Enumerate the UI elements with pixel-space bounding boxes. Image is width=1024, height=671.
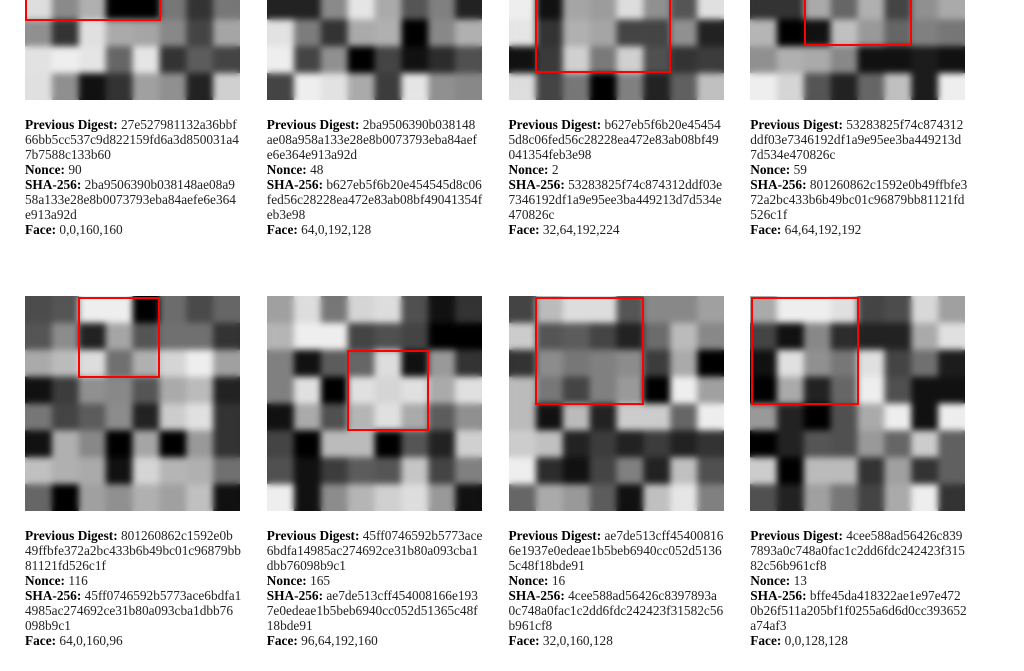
text block: digest details: Previous Digest: 4cee588ad56426c839 bbox=[750, 528, 962, 543]
text block: digest details: eb3e98 bbox=[267, 207, 305, 222]
text block: digest details: 470826c bbox=[508, 207, 554, 222]
text block: digest details: Face: 32,64,192,224 bbox=[508, 222, 620, 237]
text block: digest details: 526c1f bbox=[750, 207, 787, 222]
face box bbox=[25, 0, 161, 20]
text block: digest details: Face: 32,0,160,128 bbox=[508, 633, 613, 648]
text block: digest details: ae08a958a133e28e8b0073793eba84aef bbox=[267, 132, 477, 147]
text block: digest details: Previous Digest: 27e527981132a36bbf bbox=[25, 117, 237, 132]
text block: digest details: 6e1937e0edeae1b5beb6940cc052d5136 bbox=[508, 543, 722, 558]
text block: digest details: SHA-256: b627eb5f6b20e454545d8c06 bbox=[267, 177, 482, 192]
text block: digest details: 7893a0c748a0fac1c2dd6fdc242423f315 bbox=[750, 543, 965, 558]
panel: block 3 bbox=[508, 0, 724, 237]
image: pixel grid 3 bbox=[509, 0, 724, 100]
text block: digest details: SHA-256: 801260862c1592e0b49ffbfe3 bbox=[750, 177, 967, 192]
text block: digest details: Previous Digest: 801260862c1592e0b bbox=[25, 528, 233, 543]
text block: digest details: e6e364e913a92d bbox=[267, 147, 357, 162]
image: pixel grid 1 bbox=[25, 0, 240, 100]
text block: digest details: 098b9c1 bbox=[25, 618, 71, 633]
text block: digest details: Nonce: 13 bbox=[750, 573, 807, 588]
text block: digest details: SHA-256: 53283825f74c874312ddf03e bbox=[508, 177, 722, 192]
text block: digest details bbox=[750, 528, 967, 648]
text block: digest details: SHA-256: 2ba9506390b038148ae08a9 bbox=[25, 177, 235, 192]
text block: digest details: Previous Digest: 53283825f74c874312 bbox=[750, 117, 963, 132]
text block: digest details: 7d534e470826c bbox=[750, 147, 835, 162]
text block: digest details: e913a92d bbox=[25, 207, 77, 222]
text block: digest details: dbb76098b9c1 bbox=[267, 558, 346, 573]
text block: digest details: Nonce: 16 bbox=[508, 573, 565, 588]
text block: digest details bbox=[508, 117, 722, 237]
text block: digest details: ddf03e7346192df1a9e95ee3ba449213d bbox=[750, 132, 961, 147]
face box bbox=[535, 0, 670, 73]
text block: digest details: Face: 64,64,192,192 bbox=[750, 222, 861, 237]
text block: digest details: Nonce: 90 bbox=[25, 162, 82, 177]
face box bbox=[804, 0, 912, 46]
text block: digest details: SHA-256: 45ff0746592b5773ace6bdfa1 bbox=[25, 588, 241, 603]
text block: digest details: Nonce: 48 bbox=[267, 162, 323, 177]
text block: digest details: Face: 64,0,160,96 bbox=[25, 633, 123, 648]
text block: digest details: Face: 96,64,192,160 bbox=[267, 633, 378, 648]
text block: digest details: Nonce: 165 bbox=[267, 573, 330, 588]
text block: digest details: 6bdfa14985ac274692ce31b80a093cba1 bbox=[267, 543, 478, 558]
text block: digest details: 58a133e28e8b0073793eba84aefe6e364 bbox=[25, 192, 236, 207]
text block: digest details: SHA-256: bffe45da418322ae1e97e472 bbox=[750, 588, 961, 603]
image: pixel grid 4 bbox=[750, 0, 965, 100]
text block: digest details: Face: 0,0,128,128 bbox=[750, 633, 848, 648]
image: pixel grid 6 bbox=[267, 296, 482, 511]
text block: digest details: Face: 64,0,192,128 bbox=[267, 222, 371, 237]
text block: digest details bbox=[508, 528, 723, 648]
text block: digest details: 7b7588c133b60 bbox=[25, 147, 111, 162]
text block: digest details: Previous Digest: ae7de513cff45400816 bbox=[508, 528, 723, 543]
text block: digest details bbox=[266, 117, 482, 237]
text block: digest details: SHA-256: 4cee588ad56426c8397893a bbox=[508, 588, 717, 603]
text block: digest details: 18bde91 bbox=[267, 618, 313, 633]
image: pixel grid 2 bbox=[267, 0, 482, 100]
panel: block 4 bbox=[750, 0, 967, 237]
text block: digest details bbox=[25, 528, 241, 648]
text block: digest details bbox=[750, 117, 967, 237]
panel: block 1 bbox=[25, 0, 240, 237]
face box bbox=[750, 297, 859, 405]
panel: block 6 bbox=[266, 296, 482, 648]
text block: digest details: 5c48f18bde91 bbox=[508, 558, 585, 573]
text block: digest details: 66bb5cc537c9d822159fd6a3d850031a4 bbox=[25, 132, 239, 147]
text block: digest details: fed56c28228ea472e83ab08bf49041354f bbox=[267, 192, 482, 207]
text block: digest details: 81121fd526c1f bbox=[25, 558, 106, 573]
panel: block 8 bbox=[750, 296, 967, 648]
text block: digest details: SHA-256: ae7de513cff454008166e193 bbox=[267, 588, 478, 603]
text block: digest details: 5d8c06fed56c28228ea472e83ab08bf49 bbox=[508, 132, 719, 147]
text block: digest details: 49ffbfe372a2bc433b6b49bc01c96879bb bbox=[25, 543, 241, 558]
image: pixel grid 7 bbox=[509, 296, 724, 511]
text block: digest details: 7e0edeae1b5beb6940cc052d51365c48f bbox=[267, 603, 478, 618]
face box bbox=[535, 297, 644, 405]
text block: digest details: 0b26f511a205bf1f0255a6d6d0cc393652 bbox=[750, 603, 967, 618]
text block: digest details: a74af3 bbox=[750, 618, 787, 633]
text block: digest details: 041354feb3e98 bbox=[508, 147, 591, 162]
text block: digest details: 4985ac274692ce31b80a093cba1dbb76 bbox=[25, 603, 233, 618]
panel: block 2 bbox=[266, 0, 482, 237]
face box bbox=[347, 350, 429, 431]
text block: digest details: Nonce: 59 bbox=[750, 162, 807, 177]
text block: digest details: 7346192df1a9e95ee3ba449213d7d534e bbox=[508, 192, 722, 207]
text block: digest details bbox=[25, 117, 239, 237]
text block: digest details: b961cf8 bbox=[508, 618, 552, 633]
text block: digest details: Previous Digest: 2ba9506390b038148 bbox=[267, 117, 475, 132]
text block: digest details: Nonce: 116 bbox=[25, 573, 88, 588]
text block: digest details: 0c748a0fac1c2dd6fdc242423f31582c56 bbox=[508, 603, 723, 618]
text block: digest details: 72a2bc433b6b49bc01c96879bb81121fd bbox=[750, 192, 964, 207]
text block: digest details bbox=[266, 528, 482, 648]
text block: digest details: Nonce: 2 bbox=[508, 162, 558, 177]
image: pixel grid 8 bbox=[750, 296, 965, 511]
text block: digest details: Previous Digest: b627eb5f6b20e45454 bbox=[508, 117, 721, 132]
text block: digest details: Previous Digest: 45ff0746592b5773ace bbox=[267, 528, 482, 543]
panel: block 5 bbox=[25, 296, 241, 648]
panel: block 7 bbox=[508, 296, 724, 648]
text block: digest details: Face: 0,0,160,160 bbox=[25, 222, 123, 237]
image: pixel grid 5 bbox=[25, 296, 240, 511]
text block: digest details: 82c56b961cf8 bbox=[750, 558, 826, 573]
face box bbox=[78, 297, 160, 378]
